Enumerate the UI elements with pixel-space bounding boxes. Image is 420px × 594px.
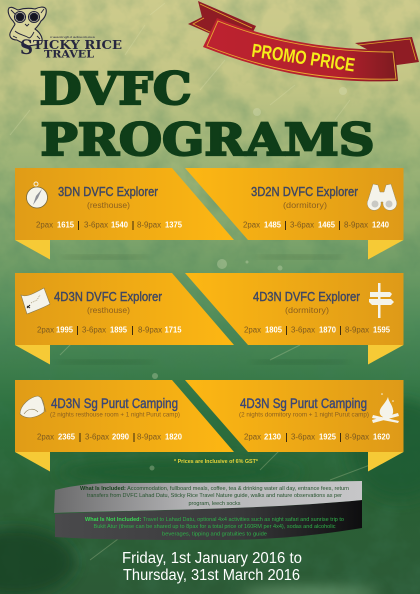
panel: 4D3N DVFC Explorer dormitory <box>185 273 404 364</box>
icon: compass <box>26 182 48 208</box>
icon: signpost <box>369 283 394 318</box>
promo ribbon <box>188 1 419 81</box>
prices: 8-9pax <box>137 220 161 230</box>
panel: 4D3N Sg Purut Camping dormitory <box>185 380 404 472</box>
prices <box>37 432 183 442</box>
ribbon body <box>203 18 398 81</box>
prices: 2090 <box>112 432 130 442</box>
logo: Sticky Rice Travel: TRAVEL <box>44 50 94 60</box>
prices: 1820 <box>165 432 183 442</box>
banner: what is included: What Is Included: Accommodation, fullboard meals, coffee, tea & drinking water all day, entrance fees, return <box>80 486 349 492</box>
prices: 1485 <box>264 220 282 230</box>
prices: 2130 <box>264 432 282 442</box>
logo wordmark: S <box>20 35 33 59</box>
banner: what is included <box>54 481 362 513</box>
panel: 4D3N Sg Purut Camping resthouse: 4D3N Sg Purut Camping <box>51 396 178 411</box>
prices: 1925 <box>319 432 337 442</box>
prices: 2pax <box>36 220 53 230</box>
prices: 1870 <box>319 326 337 334</box>
panel: 4D3N Sg Purut Camping resthouse: (2 nights resthouse room + 1 night Purut camp) <box>50 412 180 418</box>
prices: 1540 <box>111 220 129 230</box>
GST note: * Prices are Inclusive of 6% GST* <box>174 459 259 465</box>
prices: 8-9pax <box>137 432 161 442</box>
panel: 3DN DVFC Explorer resthouse: (resthouse) <box>87 200 130 210</box>
dates <box>122 550 302 584</box>
prices <box>37 326 182 335</box>
prices <box>244 326 391 335</box>
prices: 1620 <box>373 432 391 442</box>
prices: 2pax <box>244 432 261 442</box>
icon: map <box>21 288 50 314</box>
prices: 1595 <box>373 326 391 334</box>
logo: Sticky Rice Travel: TICKY RICE <box>33 37 122 52</box>
panel: 4D3N DVFC Explorer resthouse: 4D3N DVFC Explorer <box>54 290 162 304</box>
banner: what is not included: beverages, tipping and gratuities to guide <box>162 532 267 538</box>
banner: what is included: transfers from DVFC Lahad Datu, Sticky Rice Travel Nature guide, walks and nature observations as per <box>87 493 342 499</box>
prices: 3-6pax <box>85 432 109 442</box>
prices: 1465 <box>318 220 336 230</box>
banner: what is not included <box>55 500 362 540</box>
prices: 2pax <box>243 220 260 230</box>
title: DVFC PROGRAMS <box>40 64 374 166</box>
prices: 3-6pax <box>291 326 315 334</box>
prices: 2pax <box>37 326 54 334</box>
panel: 3D2N DVFC Explorer dormitory: 3D2N DVFC Explorer <box>251 185 358 199</box>
logo: Sticky Rice Travel <box>8 7 122 60</box>
prices: 1895 <box>110 326 128 334</box>
prices: 8-9pax <box>345 432 369 442</box>
ribbon label: PROMO PRICE <box>250 41 356 76</box>
dates: Friday, 1st January 2016 to <box>122 550 302 567</box>
prices: 1805 <box>265 326 283 334</box>
prices: 1615 <box>57 220 75 230</box>
panel: 4D3N Sg Purut Camping dormitory: (2 nights dormitory room + 1 night Purut camp) <box>239 412 369 418</box>
banner: what is not included: Bukit Atur (these can be shared up to 8pax for a total price of 160RM per 4x4), sodas and alcoholic <box>94 524 336 530</box>
prices: 8-9pax <box>345 326 369 334</box>
icon: tarsier <box>8 7 46 46</box>
prices: 3-6pax <box>82 326 106 334</box>
panel: 3D2N DVFC Explorer dormitory: (dormitory) <box>283 200 327 210</box>
prices: 3-6pax <box>290 220 314 230</box>
panel: 4D3N DVFC Explorer dormitory: 4D3N DVFC Explorer <box>253 290 360 304</box>
icon: binoculars <box>367 184 397 210</box>
prices: 3-6pax <box>291 432 315 442</box>
prices: 3-6pax <box>84 220 108 230</box>
prices: 8-9pax <box>138 326 162 334</box>
ribbon tails <box>188 1 256 35</box>
icon: campfire <box>372 393 399 423</box>
prices <box>243 220 390 230</box>
panel: 4D3N DVFC Explorer resthouse <box>15 273 234 364</box>
panel: 4D3N Sg Purut Camping resthouse <box>15 380 234 472</box>
prices: 2pax <box>37 432 54 442</box>
prices <box>244 432 391 442</box>
prices: 1375 <box>165 220 183 230</box>
title: DVFC PROGRAMS: DVFC <box>40 64 192 115</box>
panel: 4D3N DVFC Explorer resthouse: (resthouse) <box>87 305 130 315</box>
panel: 4D3N DVFC Explorer dormitory: (dormitory) <box>285 305 329 315</box>
panel: 4D3N Sg Purut Camping dormitory: 4D3N Sg Purut Camping <box>240 396 367 411</box>
prices: 1240 <box>372 220 390 230</box>
icon: backpack <box>20 396 46 418</box>
prices <box>36 220 183 230</box>
banner: what is included: program, leech socks <box>188 501 241 507</box>
prices: 1715 <box>164 326 182 334</box>
title: DVFC PROGRAMS: PROGRAMS <box>40 115 374 166</box>
dates: Thursday, 31st March 2016 <box>123 567 300 584</box>
banner: what is not included: What Is Not Included: Travel to Lahad Datu, optional 4x4 activities such as night safari and sunrise trip to <box>85 517 344 523</box>
prices: 8-9pax <box>344 220 368 230</box>
logo: Sticky Rice Travel: meaningful adventures <box>50 35 96 39</box>
panel: 3DN DVFC Explorer resthouse: 3DN DVFC Explorer <box>58 185 158 199</box>
prices: 2365 <box>58 432 76 442</box>
panel: 3D2N DVFC Explorer dormitory <box>185 168 404 260</box>
panel: 3DN DVFC Explorer resthouse <box>15 168 234 260</box>
prices: 1995 <box>56 326 74 334</box>
prices: 2pax <box>244 326 261 334</box>
